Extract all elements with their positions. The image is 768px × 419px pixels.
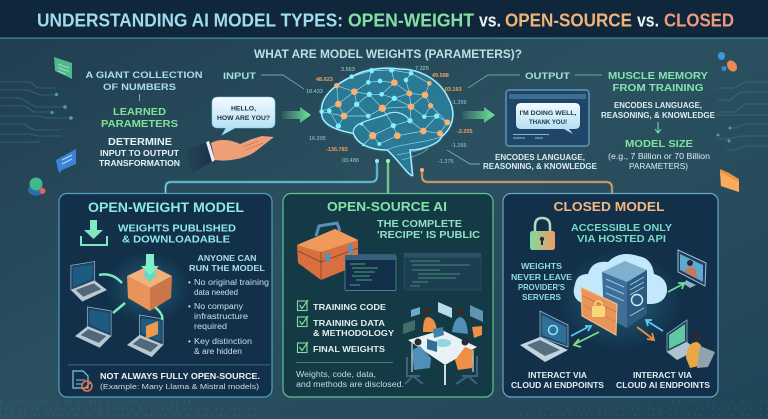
icon: folder bbox=[720, 169, 739, 192]
warning note: NOT ALWAYS FULLY OPEN-SOURCE. bbox=[100, 372, 260, 381]
checklist: & METHODOLOGY bbox=[313, 328, 394, 338]
text block: muscle memory and model size: MODEL SIZE bbox=[625, 138, 693, 150]
panel: open-source AI bbox=[283, 194, 493, 397]
text block: collection of numbers: OF NUMBERS bbox=[103, 82, 176, 93]
caption: interact left: CLOUD AI ENDPOINTS bbox=[511, 381, 605, 390]
icon: blue and orange shapes bbox=[718, 52, 739, 73]
title bbox=[37, 10, 734, 30]
orange nodes bbox=[334, 79, 450, 139]
caption: interact left: INTERACT VIA bbox=[528, 371, 587, 380]
text: anyone can run the model: No original training bbox=[194, 278, 269, 287]
binary pattern bottom: 0 1 01 1 001 10 01 01 100 1 0 1 10 01 110 01 10 bbox=[0, 400, 190, 404]
caption: interact right bbox=[616, 371, 711, 390]
floating numbers: -136.783 bbox=[326, 147, 348, 153]
text: anyone can run the model bbox=[188, 253, 269, 356]
caption: interact left bbox=[511, 371, 605, 390]
subheading: WEIGHTS PUBLISHED bbox=[118, 222, 236, 234]
subheading: ACCESSIBLE ONLY bbox=[571, 223, 672, 234]
input speech bubble: HOW ARE YOU? bbox=[217, 115, 270, 122]
floating numbers: 49.588 bbox=[432, 73, 449, 79]
arrows: data flow bbox=[571, 283, 684, 347]
binary pattern bottom: 01 101 01 10 01 10 01 10 01 110 01 1 01 10 bbox=[520, 413, 768, 417]
floating numbers: 48.623 bbox=[316, 77, 333, 83]
text block: muscle memory and model size: PARAMETERS) bbox=[629, 162, 688, 171]
icon: sphere cluster bbox=[28, 178, 46, 196]
text: weights never leave: SERVERS bbox=[522, 292, 561, 302]
title: UNDERSTANDING AI MODEL TYPES: bbox=[37, 10, 343, 30]
text: weights never leave: NEVER LEAVE bbox=[511, 272, 572, 282]
floating numbers: -1.359 bbox=[451, 100, 467, 106]
warning note bbox=[100, 372, 260, 391]
binary pattern bottom: 1 0 10 1 01 0 110 01 01 10 bbox=[620, 400, 768, 404]
network links bbox=[322, 70, 447, 145]
heading: CLOSED MODEL bbox=[554, 200, 665, 214]
text block: muscle memory and model size: MUSCLE MEMORY bbox=[608, 71, 708, 82]
icon: toolbox bbox=[297, 223, 358, 280]
checklist: TRAINING CODE bbox=[313, 302, 386, 312]
icon: blue chat bubble bbox=[56, 149, 76, 173]
title: OPEN-SOURCE bbox=[505, 10, 632, 30]
subheading: & DOWNLOADABLE bbox=[122, 234, 230, 246]
text block: collection of numbers: TRANSFORMATION bbox=[99, 158, 180, 168]
checklist bbox=[298, 300, 394, 354]
text: anyone can run the model: infrastructure bbox=[194, 312, 249, 321]
output window: I'M DOING WELL, bbox=[520, 110, 577, 117]
illustration: team around table bbox=[403, 302, 483, 385]
text block: collection of numbers: LEARNED bbox=[113, 107, 166, 118]
floating numbers: -1.265 bbox=[451, 143, 467, 149]
binary pattern bottom: 1 01 0 101 10 01 01 110 01 1 01 01 10 01 10 bbox=[540, 407, 768, 411]
connector: brain to closed panel bbox=[420, 168, 612, 194]
illustration: laptop left bbox=[520, 311, 568, 362]
warning note: (Example: Many Llama & Mistral models) bbox=[100, 382, 260, 391]
illustration: monitor bbox=[678, 250, 706, 288]
heading: OPEN-SOURCE AI bbox=[327, 200, 447, 214]
text block: collection of numbers: INPUT TO OUTPUT bbox=[100, 148, 179, 158]
icon: padlock bbox=[530, 218, 555, 250]
illustration: server bbox=[602, 261, 647, 328]
floating numbers: 16.295 bbox=[309, 136, 326, 142]
code window small bbox=[345, 255, 396, 290]
text: anyone can run the model: No company bbox=[194, 302, 243, 311]
caption: interact right: INTERACT VIA bbox=[633, 371, 692, 380]
text: anyone can run the model: • bbox=[188, 278, 191, 287]
binary pattern bottom bbox=[0, 400, 768, 417]
text: anyone can run the model: required bbox=[194, 322, 227, 331]
subheading bbox=[571, 223, 672, 245]
binary pattern bottom: 001 10 11 01 00 10 1 01 110 10 01 1 0 10 01 110 01 1 001 bbox=[0, 407, 250, 411]
heading: OPEN-WEIGHT MODEL bbox=[88, 200, 244, 215]
floating numbers: 7.325 bbox=[415, 66, 429, 72]
subheading: 'RECIPE' IS PUBLIC bbox=[377, 230, 480, 241]
floating numbers: -03.193 bbox=[443, 87, 462, 93]
code window large bbox=[404, 253, 481, 290]
arrow: input to brain bbox=[282, 107, 311, 123]
floating numbers: 3.563 bbox=[341, 67, 355, 73]
icon: document with prohibited sign bbox=[73, 371, 92, 391]
text block: muscle memory and model size: ENCODES LANGUAGE, bbox=[614, 101, 702, 110]
illustration: package and laptops bbox=[71, 252, 190, 357]
subheading: VIA HOSTED API bbox=[577, 234, 666, 245]
text: anyone can run the model: & are hidden bbox=[194, 347, 242, 356]
floating numbers: 03.488 bbox=[342, 158, 359, 164]
text block: collection of numbers: DETERMINE bbox=[108, 137, 172, 148]
circuit traces right bbox=[715, 82, 768, 150]
circuit traces left bbox=[0, 82, 73, 142]
text: anyone can run the model: data needed bbox=[194, 288, 238, 297]
text: anyone can run the model: • bbox=[188, 337, 191, 346]
text: weights never leave: WEIGHTS bbox=[521, 261, 562, 271]
text: weights never leave: PROVIDER'S bbox=[518, 282, 565, 292]
icon: open hand bbox=[185, 136, 274, 173]
disclosure note bbox=[296, 370, 404, 389]
disclosure note: and methods are disclosed. bbox=[296, 380, 404, 389]
caption under output window bbox=[483, 153, 597, 171]
label: output bbox=[468, 71, 602, 88]
text block: muscle memory and model size: FROM TRAINING bbox=[612, 83, 704, 94]
text block: muscle memory and model size bbox=[601, 71, 715, 171]
title: vs. bbox=[479, 10, 501, 30]
text block: muscle memory and model size: (e.g., 7 Billion or 70 Billion bbox=[608, 152, 710, 161]
input speech bubble: HELLO, bbox=[231, 106, 256, 112]
connector: brain to open-weight panel bbox=[166, 159, 379, 194]
illustration: cloud bbox=[558, 250, 682, 350]
checklist: TRAINING DATA bbox=[313, 318, 385, 328]
disclosure note: Weights, code, data, bbox=[296, 370, 376, 379]
panel: open-weight model bbox=[59, 194, 272, 397]
text: anyone can run the model: RUN THE MODEL bbox=[189, 263, 265, 273]
floating numbers bbox=[306, 66, 480, 165]
icon: download bbox=[81, 220, 107, 245]
title: vs. bbox=[637, 10, 659, 30]
label: output: OUTPUT bbox=[525, 71, 570, 82]
text block: collection of numbers bbox=[86, 70, 203, 168]
text: anyone can run the model: • bbox=[188, 302, 191, 311]
output window: THANK YOU! bbox=[529, 119, 567, 126]
connector: brain to open-source panel bbox=[386, 159, 390, 194]
output window bbox=[506, 90, 589, 146]
floating numbers: -1.275 bbox=[438, 159, 454, 165]
blue nodes bbox=[319, 67, 439, 146]
subtitle: WHAT ARE MODEL WEIGHTS (PARAMETERS)? bbox=[254, 49, 522, 61]
label: input: INPUT bbox=[223, 71, 256, 82]
text block: collection of numbers: PARAMETERS bbox=[101, 119, 178, 130]
text: anyone can run the model: ANYONE CAN bbox=[198, 253, 256, 263]
illustration: firewall bbox=[581, 287, 617, 335]
panel: closed model bbox=[503, 194, 718, 397]
checklist: FINAL WEIGHTS bbox=[313, 344, 385, 354]
subheading bbox=[118, 222, 236, 246]
label: input bbox=[223, 71, 304, 89]
caption under output window: ENCODES LANGUAGE, bbox=[495, 153, 585, 162]
floating numbers: -2.255 bbox=[457, 129, 473, 135]
brain outline bbox=[322, 68, 453, 176]
subheading: THE COMPLETE bbox=[377, 219, 462, 230]
illustration: laptop and person right bbox=[667, 320, 715, 368]
brain network bbox=[319, 67, 453, 176]
input speech bubble bbox=[212, 97, 275, 135]
text block: muscle memory and model size: REASONING, & KNOWLEDGE bbox=[601, 111, 715, 120]
caption: interact right: CLOUD AI ENDPOINTS bbox=[616, 381, 711, 390]
text block: collection of numbers: A GIANT COLLECTION bbox=[86, 70, 203, 81]
title: CLOSED bbox=[664, 10, 734, 30]
text: weights never leave bbox=[511, 261, 572, 302]
floating numbers: 18.433 bbox=[306, 89, 323, 95]
caption under output window: REASONING, & KNOWLEDGE bbox=[483, 162, 597, 171]
title: OPEN-WEIGHT bbox=[348, 10, 474, 30]
subheading bbox=[377, 219, 480, 241]
icon: green chat bubble bbox=[54, 57, 72, 79]
title bar bbox=[0, 0, 768, 39]
arrow: brain to output bbox=[462, 107, 495, 123]
binary pattern bottom: 101 10 01 01 10 1 10 0 1 100 1 01 10 01 1 0 01 10 01 101 bbox=[0, 413, 260, 417]
text: anyone can run the model: Key distinction bbox=[194, 337, 252, 346]
